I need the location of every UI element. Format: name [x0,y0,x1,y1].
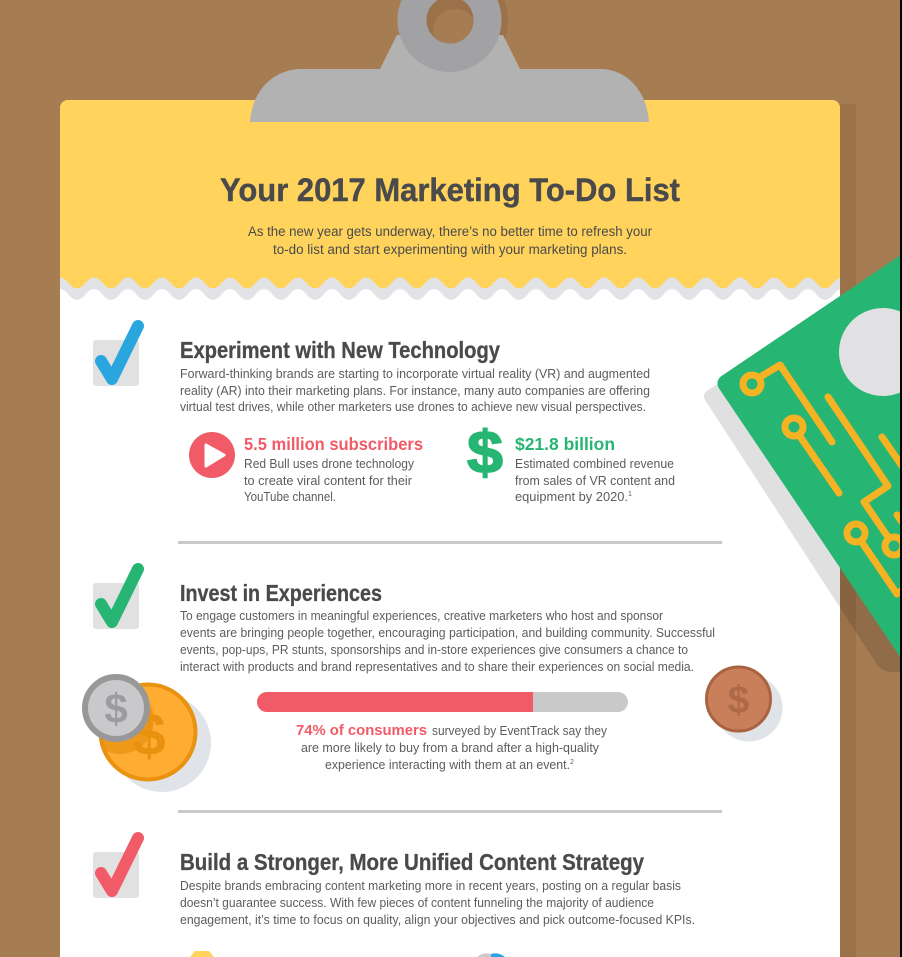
section 1 body: Forward-thinking brands are starting to incorporate virtual reality (VR) and augmented [180,366,650,381]
icon: play button [189,432,235,478]
icon: copper coin [706,667,782,742]
stat caption 74% [296,722,607,772]
intro text: As the new year gets underway, there’s no better time to refresh your [248,224,652,239]
section 3 body: engagement, it’s time to focus on quality, align your objectives and pick outcome-focused KPIs. [180,912,695,927]
icon: pie chart top [477,953,505,957]
icon: yellow hexagon top [190,951,214,957]
stat caption 74%: 2 [570,759,574,766]
icon: copper coin: $ [728,679,750,722]
stat: revenue: Estimated combined revenue [515,456,674,471]
icon: dollar sign: $ [467,419,503,486]
section 1 body: virtual test drives, while other marketers use drones to achieve new visual perspectives. [180,399,646,414]
intro text: to-do list and start experimenting with your marketing plans. [273,242,627,257]
section 2 body [180,608,715,674]
icon: gold and silver coins: $ [132,701,166,768]
section 3 checkbox [93,838,139,898]
intro text [248,224,652,257]
icon: gold and silver coins: $ [104,685,128,732]
stat: revenue: $21.8 billion [515,434,615,454]
stat: revenue [515,434,675,504]
clipboard clip [250,0,649,122]
section 3 body: doesn’t guarantee success. With few pieces of content funneling the majority of audience [180,895,654,910]
section 3 body: Despite brands embracing content marketing more in recent years, posting on a regular basis [180,878,681,893]
stat caption 74%: are more likely to buy from a brand after a high-quality [301,740,599,755]
stat caption 74%: 74% of consumers [296,722,427,739]
stat: subscribers: to create viral content for their [244,473,413,488]
circuit board [704,202,902,713]
section 2 checkbox [93,569,139,629]
section 2 body: events, pop-ups, PR stunts, sponsorships and in-store experiences give consumers a chance to [180,642,688,657]
stat caption 74%: surveyed by EventTrack say they [432,723,607,738]
stat: subscribers: Red Bull uses drone technology [244,456,414,471]
stat: subscribers: 5.5 million subscribers [244,434,423,454]
clipboard shadow [70,104,856,957]
stat: subscribers [244,434,423,504]
stat: revenue: 1 [628,491,632,498]
icon: gold and silver coins [85,677,211,792]
stat: subscribers: YouTube channel. [244,489,336,504]
section 2 heading: Invest in Experiences [180,580,382,606]
progress bar 74% [257,692,628,712]
stat: revenue: from sales of VR content and [515,473,675,488]
section 1 heading: Experiment with New Technology [180,337,500,363]
section 1 checkbox [93,326,139,386]
section 3 heading: Build a Stronger, More Unified Content Strategy [180,849,644,875]
section 2 body: events are bringing people together, encouraging participation, and building community. Successful [180,625,715,640]
stat caption 74%: experience interacting with them at an event. [325,757,570,772]
stat: revenue: equipment by 2020. [515,489,628,504]
section 1 body [180,366,650,414]
title: Your 2017 Marketing To-Do List [220,172,680,208]
section 2 body: To engage customers in meaningful experiences, creative marketers who host and sponsor [180,608,664,623]
section 1 body: reality (AR) into their marketing plans. For instance, many auto companies are offering [180,383,650,398]
section 2 body: interact with products and brand representatives and to share their experiences on social media. [180,659,694,674]
paper sheet [52,100,850,957]
section 3 body [180,878,695,927]
